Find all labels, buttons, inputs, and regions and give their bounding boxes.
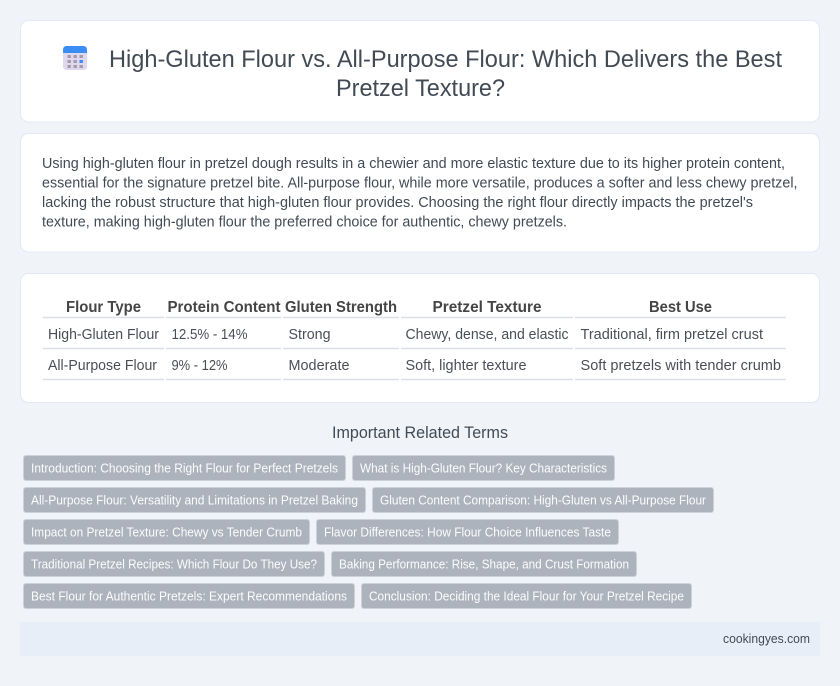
- tag: [24, 456, 346, 480]
- table row: high-gluten flour: High-Gluten Flour: [48, 327, 159, 343]
- table header row: Flour Type: [66, 299, 141, 316]
- tag: [24, 552, 324, 576]
- tag: Best Flour for Authentic Pretzels: Expert Recommendations: [31, 588, 347, 604]
- footer bar: [20, 622, 820, 656]
- tag: [24, 488, 366, 512]
- table header row: Protein Content: [168, 299, 281, 316]
- table row: high-gluten flour: Strong: [288, 327, 330, 343]
- text block: description: Using high-gluten flour in pretzel dough results in a chewier and more elastic texture due to its higher protein content,: [42, 156, 785, 172]
- text block: description: essential for the signature pretzel bite. All-purpose flour, while more versatile, produces a softer and less chewy pretzel,: [42, 176, 798, 192]
- table row: all-purpose flour: Soft, lighter texture: [406, 358, 526, 374]
- heading: related terms: Important Related Terms: [332, 424, 508, 442]
- panel: intro paragraph: [20, 134, 820, 252]
- table header row: Gluten Strength: [285, 299, 397, 316]
- tag: [24, 584, 354, 608]
- tag: Impact on Pretzel Texture: Chewy vs Tender Crumb: [31, 524, 302, 540]
- icon: calendar: [63, 46, 87, 70]
- table header row: Pretzel Texture: [432, 299, 542, 316]
- table row: high-gluten flour: 12.5% - 14%: [172, 327, 248, 343]
- title: [109, 46, 782, 102]
- text block: description: lacking the robust structure that high-gluten flour provides. Choosing the right flour directly impacts the pretzel's: [42, 195, 753, 211]
- tag: Conclusion: Deciding the Ideal Flour for Your Pretzel Recipe: [369, 588, 684, 604]
- tag: [362, 584, 692, 608]
- table row: all-purpose flour: [48, 358, 781, 374]
- text block: description: [42, 156, 798, 230]
- panel: title header: [20, 20, 820, 122]
- tag: Flavor Differences: How Flour Choice Influences Taste: [324, 524, 611, 540]
- table row: high-gluten flour: Traditional, firm pretzel crust: [580, 327, 763, 343]
- tag: Gluten Content Comparison: High-Gluten vs All-Purpose Flour: [380, 492, 707, 508]
- title: High-Gluten Flour vs. All-Purpose Flour: Which Delivers the Best: [109, 46, 782, 73]
- table row: high-gluten flour: Chewy, dense, and elastic: [406, 327, 568, 343]
- tag: What is High-Gluten Flour? Key Characteristics: [360, 460, 607, 476]
- text block: description: texture, making high-gluten flour the preferred choice for authentic, chewy pretzels.: [42, 214, 567, 230]
- table row: all-purpose flour: All-Purpose Flour: [48, 358, 157, 374]
- tag: [316, 520, 618, 544]
- table row: high-gluten flour: [48, 327, 763, 343]
- tag: Introduction: Choosing the Right Flour for Perfect Pretzels: [31, 460, 338, 476]
- tag: [352, 456, 614, 480]
- table row: all-purpose flour: Moderate: [288, 358, 350, 374]
- panel: comparison table: [20, 274, 820, 402]
- tag: [332, 552, 636, 576]
- tag: Traditional Pretzel Recipes: Which Flour Do They Use?: [31, 556, 317, 572]
- table row: all-purpose flour: 9% - 12%: [172, 358, 228, 374]
- tag: [372, 488, 714, 512]
- table row: all-purpose flour: Soft pretzels with tender crumb: [580, 358, 781, 374]
- table header row: Best Use: [649, 299, 712, 316]
- table header row: [66, 299, 712, 316]
- title: Pretzel Texture?: [336, 75, 505, 102]
- footer source text: cookingyes.com: [723, 632, 810, 646]
- tags: related terms: [24, 456, 714, 608]
- tag: Baking Performance: Rise, Shape, and Crust Formation: [339, 556, 629, 572]
- tag: [24, 520, 310, 544]
- tag: All-Purpose Flour: Versatility and Limitations in Pretzel Baking: [31, 492, 358, 508]
